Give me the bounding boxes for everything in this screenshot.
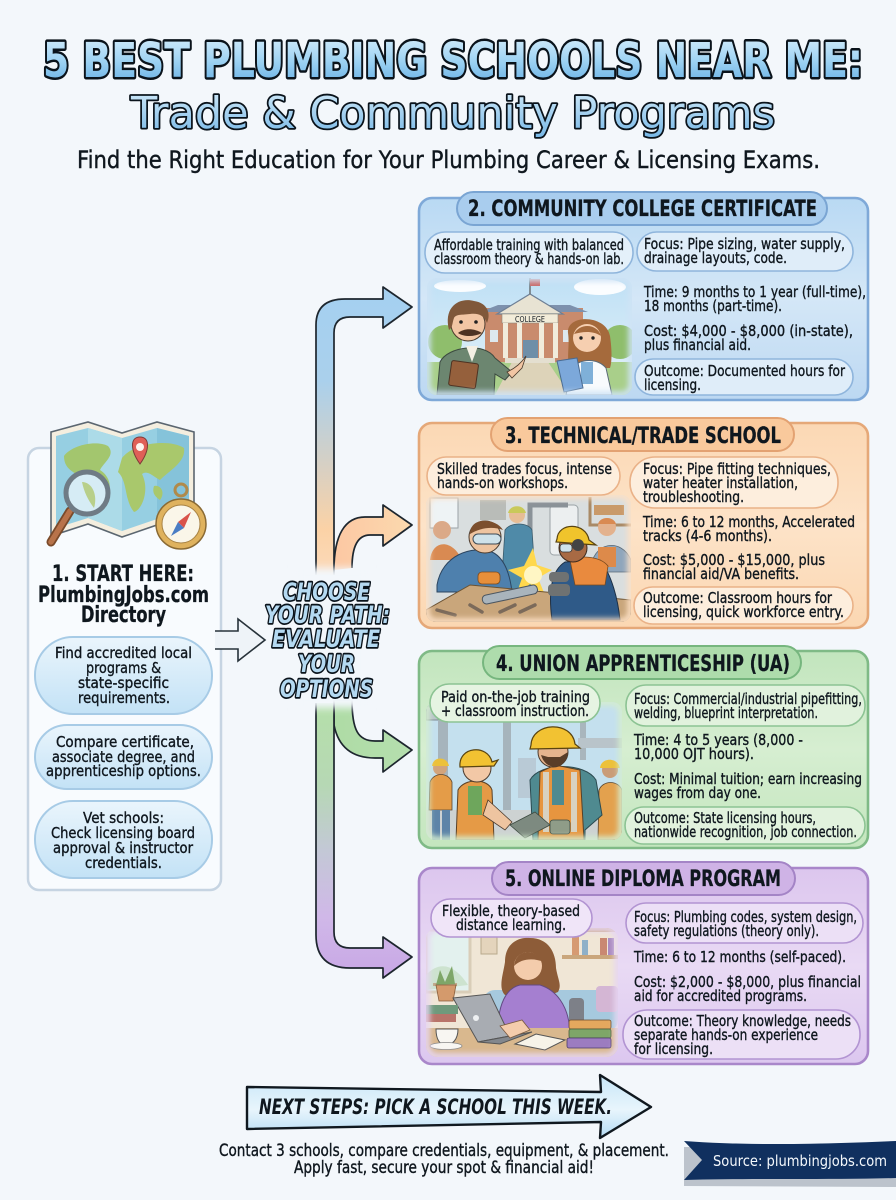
detail: focus: Focus: Pipe sizing, water supply,	[644, 235, 845, 253]
detail: outcome: Outcome: Documented hours for	[644, 362, 846, 380]
step: vet schools	[35, 801, 212, 878]
detail: cost	[634, 770, 862, 802]
illustration: college campus with instructor and student	[427, 278, 637, 395]
heading: online diploma: 5. ONLINE DIPLOMA PROGRAM	[505, 867, 781, 892]
detail: cost	[644, 322, 853, 354]
step: vet schools: Vet schools:	[83, 809, 164, 827]
detail: outcome	[634, 587, 853, 624]
detail: time: Time: 4 to 5 years (8,000 -	[633, 731, 803, 749]
step: vet schools: credentials.	[85, 854, 162, 872]
heading: start here: PlumbingJobs.com	[38, 583, 209, 608]
detail: outcome: Outcome: State licensing hours,	[634, 809, 816, 827]
step: compare options: Compare certificate,	[56, 733, 194, 751]
detail: focus	[630, 457, 838, 508]
arrow: next steps: NEXT STEPS: PICK A SCHOOL THIS WEEK.	[259, 1095, 612, 1119]
summary: paid training: Paid on-the-job training	[441, 688, 590, 706]
step: compare options: apprenticeship options.	[46, 762, 201, 780]
detail: outcome: for licensing.	[634, 1040, 713, 1058]
heading: online diploma	[492, 862, 795, 895]
label: choose your path: YOUR PATH:	[265, 601, 390, 629]
label: choose your path	[265, 578, 390, 703]
arrow: to online diploma	[316, 703, 412, 978]
illustration: welding workshop	[426, 495, 631, 622]
detail: time: 18 months (part-time).	[644, 297, 782, 315]
detail: focus	[626, 903, 863, 943]
detail: outcome: Outcome: Classroom hours for	[643, 589, 833, 607]
detail: outcome: licensing, quick workforce entry.	[643, 603, 844, 621]
summary: paid training	[430, 684, 600, 722]
summary: flexible learning: distance learning.	[456, 916, 566, 934]
summary: flexible learning: Flexible, theory-based	[442, 902, 580, 920]
detail: outcome	[635, 359, 853, 395]
detail: time	[643, 283, 866, 315]
call to action text: Apply fast, secure your spot & financial aid!	[294, 1158, 594, 1178]
step: find accredited programs: state-specific	[78, 674, 169, 692]
summary: skilled trades	[427, 457, 620, 495]
detail: focus: Focus: Pipe fitting techniques,	[643, 460, 831, 478]
detail: cost: Cost: $4,000 - $8,000 (in-state),	[644, 322, 853, 340]
detail: time: 10,000 OJT hours).	[634, 745, 754, 763]
detail: cost: aid for accredited programs.	[634, 987, 807, 1005]
detail: outcome	[625, 807, 865, 844]
heading: start here: 1. START HERE:	[52, 562, 194, 587]
heading: community college	[457, 192, 827, 225]
step: find accredited programs	[35, 637, 212, 714]
illustration: apprentice handshake on site	[426, 700, 622, 840]
step: find accredited programs: requirements.	[78, 689, 170, 707]
arrow: start to choose your path	[215, 619, 265, 661]
detail: time: Time: 6 to 12 months, Accelerated	[642, 513, 855, 531]
detail: time	[642, 513, 855, 545]
label: choose your path: EVALUATE	[272, 625, 380, 653]
detail: outcome	[623, 1010, 860, 1059]
heading: union apprenticeship	[483, 646, 801, 679]
summary: paid training: + classroom instruction.	[441, 702, 589, 720]
step: vet schools: approval & instructor	[53, 839, 194, 857]
detail: cost	[643, 551, 825, 583]
heading: trade school	[491, 418, 794, 451]
heading: union apprenticeship: 4. UNION APPRENTICESHIP (UA)	[496, 652, 790, 677]
illustration: student studying on laptop	[426, 926, 618, 1057]
step: find accredited programs: Find accredited local	[55, 644, 192, 662]
step: compare options	[35, 725, 212, 789]
heading: trade school: 3. TECHNICAL/TRADE SCHOOL	[505, 424, 781, 449]
step: vet schools: Check licensing board	[51, 824, 195, 842]
detail: cost: financial aid/VA benefits.	[643, 565, 799, 583]
detail: focus	[626, 685, 865, 726]
detail: outcome: licensing.	[644, 376, 701, 394]
detail: outcome: separate hands-on experience	[634, 1026, 818, 1044]
arrow: to union apprenticeship	[334, 700, 412, 772]
subtitle: Find the Right Education for Your Plumbing Career & Licensing Exams.	[77, 146, 820, 174]
title: Trade & Community Programs	[130, 88, 775, 139]
summary: affordable training: Affordable training with balanced	[434, 236, 624, 254]
detail: cost: Cost: $5,000 - $15,000, plus	[643, 551, 825, 569]
panel: start here directory	[28, 422, 221, 890]
label: choose your path: OPTIONS	[280, 675, 373, 703]
source banner	[684, 1141, 896, 1187]
detail: focus	[637, 232, 853, 271]
detail: focus: drainage layouts, code.	[644, 249, 787, 267]
illustration: college campus with instructor and student: COLLEGE	[515, 315, 545, 324]
icon: map with magnifier and compass	[51, 422, 206, 549]
detail: focus: troubleshooting.	[643, 488, 744, 506]
panel: online diploma program	[419, 862, 868, 1064]
arrow: to trade school	[334, 505, 412, 570]
summary: skilled trades: Skilled trades focus, intense	[437, 460, 612, 478]
step: compare options: associate degree, and	[52, 748, 195, 766]
title	[43, 33, 863, 139]
arrow: to community college	[316, 287, 412, 575]
heading: start here: Directory	[81, 603, 166, 628]
detail: time: tracks (4-6 months).	[643, 527, 772, 545]
panel: union apprenticeship	[419, 646, 868, 848]
detail: cost: wages from day one.	[634, 784, 761, 802]
detail: focus: safety regulations (theory only).	[634, 922, 819, 940]
panel: community college certificate	[419, 192, 868, 400]
detail: time: Time: 6 to 12 months (self-paced).	[633, 948, 846, 966]
detail: focus: water heater installation,	[643, 474, 798, 492]
summary: flexible learning	[431, 899, 592, 937]
step: find accredited programs: programs &	[86, 659, 161, 677]
summary: affordable training	[425, 232, 633, 273]
label: choose your path: CHOOSE	[283, 578, 370, 606]
heading: start here	[38, 562, 209, 628]
label: choose your path: YOUR	[298, 650, 355, 678]
detail: time	[633, 731, 803, 763]
call to action text	[219, 1141, 669, 1178]
panel: technical trade school	[419, 418, 868, 628]
call to action text: Contact 3 schools, compare credentials, equipment, & placement.	[219, 1141, 669, 1161]
summary: affordable training: classroom theory & hands-on lab.	[434, 250, 624, 268]
arrow: next steps	[247, 1075, 651, 1138]
detail: cost: plus financial aid.	[644, 336, 751, 354]
detail: focus: welding, blueprint interpretation.	[634, 704, 818, 722]
detail: cost	[634, 973, 861, 1005]
summary: skilled trades: hands-on workshops.	[437, 474, 568, 492]
